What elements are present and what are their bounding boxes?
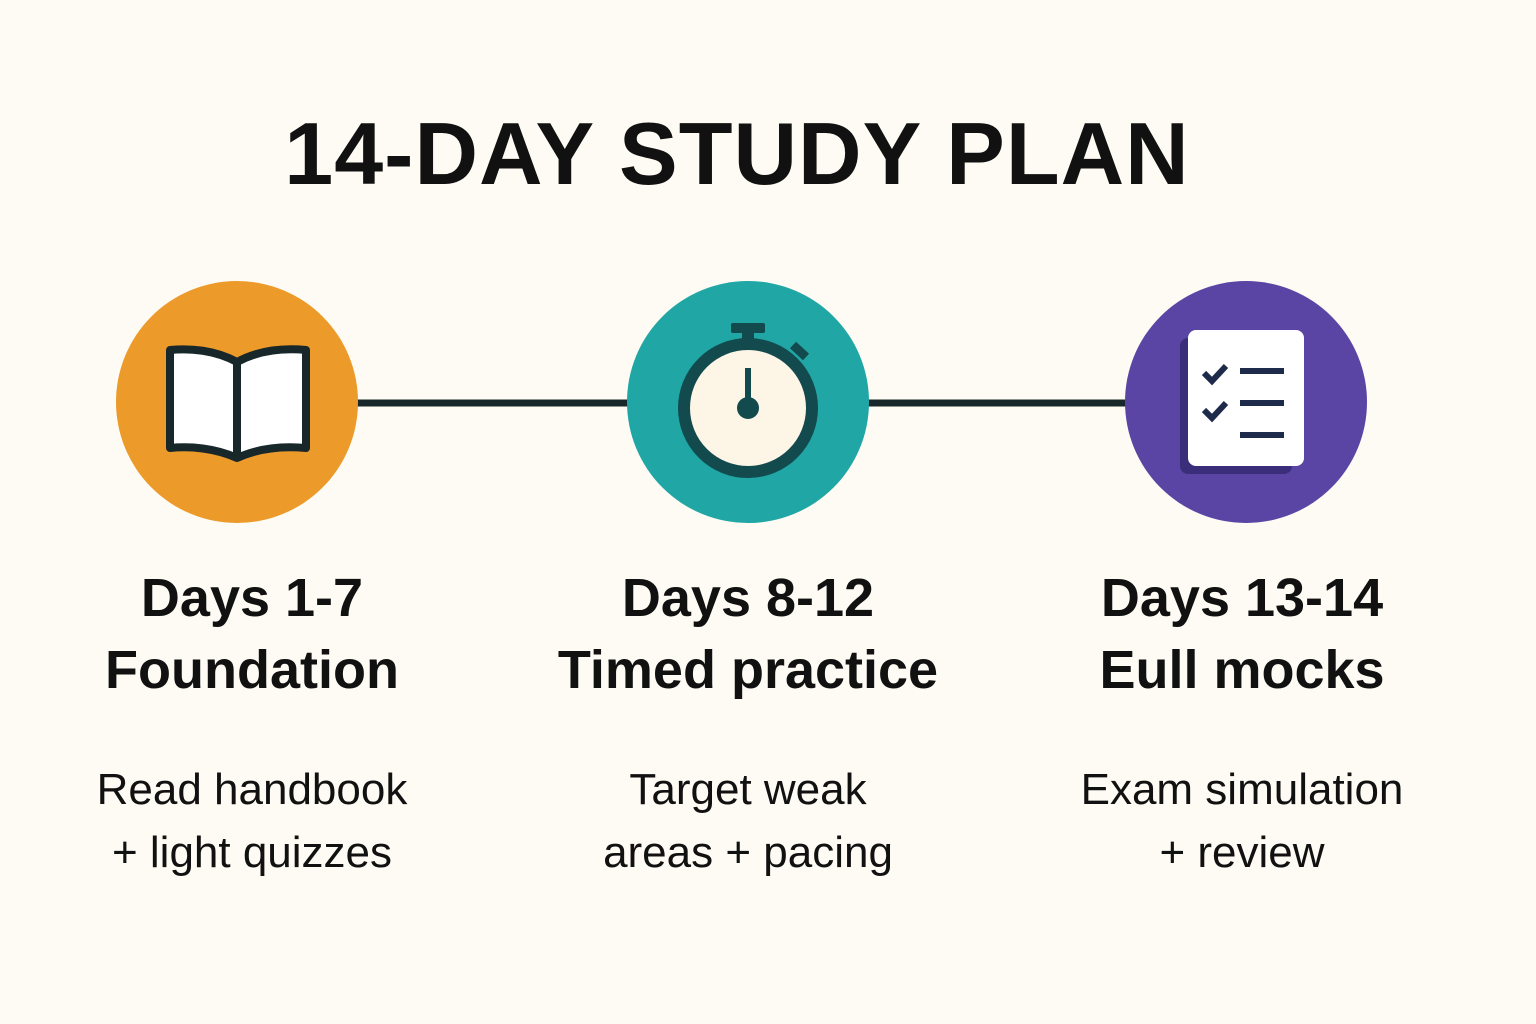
connector line — [350, 400, 1135, 406]
phase 2 heading — [558, 568, 938, 700]
title: 14-DAY STUDY PLAN — [284, 104, 1190, 203]
phase 3 heading: Eull mocks — [1099, 640, 1385, 700]
phase 3 description: Exam simulation — [1081, 765, 1403, 814]
phase 1 description: + light quizzes — [112, 828, 392, 877]
phase 3 heading — [1099, 568, 1385, 700]
phase 1 heading: Days 1-7 — [141, 568, 363, 628]
icon: orange circle with book — [116, 281, 358, 523]
icon: teal circle with stopwatch — [627, 281, 869, 523]
phase 1 description: Read handbook — [97, 765, 407, 814]
phase 2 description: areas + pacing — [603, 828, 893, 877]
phase 3 heading: Days 13-14 — [1101, 568, 1383, 628]
phase 2 heading: Days 8-12 — [622, 568, 874, 628]
phase 1 description — [97, 765, 408, 877]
icon: purple circle with checklist — [1125, 281, 1367, 523]
phase 3 description — [1081, 765, 1403, 877]
phase 2 description — [603, 765, 893, 877]
phase 3 description: + review — [1159, 828, 1325, 877]
phase 1 heading: Foundation — [105, 640, 399, 700]
phase 2 description: Target weak — [629, 765, 867, 814]
phase 2 heading: Timed practice — [558, 640, 938, 700]
phase 1 heading — [105, 568, 399, 700]
